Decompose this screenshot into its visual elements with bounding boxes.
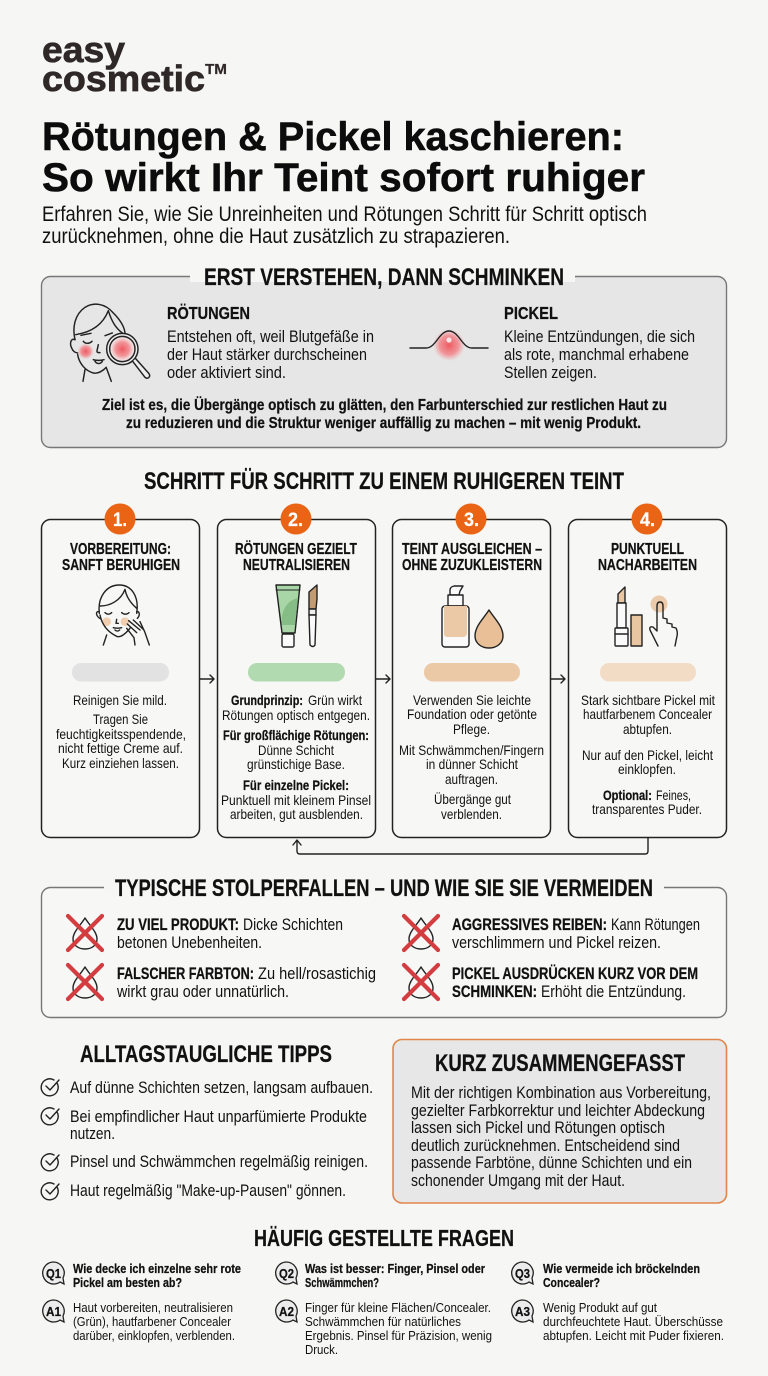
panel: everyday tips: nutzen.	[70, 1125, 115, 1143]
colour swatch	[600, 663, 696, 682]
step 1 card: Tragen Sie	[93, 711, 148, 727]
step 3 card: OHNE ZUZUKLEISTERN	[402, 557, 542, 574]
heading: steps: SCHRITT FÜR SCHRITT ZU EINEM RUHIGEREN TEINT	[144, 468, 624, 495]
step 1 card: VORBEREITUNG:	[70, 541, 171, 558]
step 2 card	[218, 504, 376, 838]
icon: A1 bubble	[43, 1300, 64, 1322]
step 2 card: Für einzelne Pickel:	[243, 777, 349, 793]
icon: A1 bubble: A1	[46, 1304, 61, 1319]
step 1 card: 1.	[113, 510, 127, 531]
panel: pitfalls: Erhöht die Entzündung.	[541, 983, 686, 1001]
panel: pitfalls: FALSCHER FARBTON:	[117, 965, 254, 983]
panel: pitfalls: Kann Rötungen	[611, 916, 700, 934]
panel: pitfalls: Dicke Schichten	[243, 916, 343, 934]
step 1 card: Kurz einziehen lassen.	[62, 755, 179, 771]
subtitle: Erfahren Sie, wie Sie Unreinheiten und Rötungen Schritt für Schritt optisch	[42, 203, 647, 226]
FAQ column 3: abtupfen. Leicht mit Puder fixieren.	[543, 1328, 724, 1343]
step 3 card: Pflege.	[453, 721, 490, 737]
step 4 card: Stark sichtbare Pickel mit	[581, 692, 715, 708]
step 3 card: Übergänge gut	[434, 790, 511, 807]
panel: everyday tips	[41, 1041, 373, 1200]
step 3 card: verblenden.	[441, 806, 502, 822]
step 2 card: Dünne Schicht	[258, 742, 334, 758]
block: redness: Entstehen oft, weil Blutgefäße in	[167, 328, 374, 346]
title: Rötungen & Pickel kaschieren:	[42, 115, 624, 159]
colour swatch	[248, 663, 345, 682]
panel: pitfalls: verschlimmern und Pickel reizen.	[452, 934, 661, 952]
icon: crossed drop 4	[404, 965, 438, 999]
title	[42, 115, 645, 200]
step 4 card: 4.	[640, 510, 655, 531]
step 2 card: Grundprinzip:	[231, 692, 303, 708]
step 2 card: 2.	[288, 510, 303, 531]
icon: crossed drop 1	[68, 916, 102, 950]
block: redness: RÖTUNGEN	[167, 303, 250, 323]
heading: first understand: ERST VERSTEHEN, DANN SCHMINKEN	[204, 264, 564, 291]
goal statement	[102, 395, 667, 432]
step 4 card: Nur auf den Pickel, leicht	[582, 747, 713, 763]
step 4 card: transparentes Puder.	[592, 801, 702, 817]
icon: Q3 bubble	[512, 1262, 533, 1284]
icon: crossed drop 3	[404, 916, 438, 950]
goal statement: Ziel ist es, die Übergänge optisch zu glätten, den Farbunterschied zur restlichen Haut zu	[102, 395, 667, 414]
step 4 card: Feines,	[656, 787, 691, 803]
icon: A3 bubble	[512, 1300, 533, 1322]
icon: face with magnifier	[71, 304, 150, 381]
subtitle: zurücknehmen, ohne die Haut zusätzlich zu strapazieren.	[42, 225, 510, 248]
panel: pitfalls: SCHMINKEN:	[452, 983, 537, 1001]
icon: Q1 bubble	[43, 1262, 64, 1284]
panel: pitfalls: betonen Unebenheiten.	[117, 934, 262, 952]
panel: summary: gezielter Farbkorrektur und leichter Abdeckung	[411, 1102, 705, 1120]
panel: summary: KURZ ZUSAMMENGEFASST	[435, 1050, 685, 1077]
step 1 card: nicht fettige Creme auf.	[58, 740, 183, 756]
block: pimples: PICKEL	[504, 303, 558, 323]
step 2 card: Punktuell mit kleinem Pinsel	[221, 792, 371, 808]
icon: A3 bubble: A3	[515, 1304, 530, 1319]
step 3 card: in dünner Schicht	[426, 756, 518, 772]
step 3 card: Foundation oder getönte	[407, 706, 537, 722]
panel: pitfalls: PICKEL AUSDRÜCKEN KURZ VOR DEM	[452, 964, 698, 983]
panel: summary: schonender Umgang mit der Haut.	[411, 1172, 625, 1190]
panel: pitfalls: ZU VIEL PRODUKT:	[117, 916, 239, 934]
FAQ column 3	[512, 1261, 724, 1343]
FAQ column 1	[43, 1261, 241, 1343]
step 4 card: NACHARBEITEN	[598, 557, 697, 574]
panel: pitfalls: Zu hell/rosastichig	[258, 965, 376, 983]
step 2 card: Grün wirkt	[308, 692, 362, 708]
FAQ column 3: Wenig Produkt auf gut	[543, 1300, 657, 1315]
panel: everyday tips: Auf dünne Schichten setzen, langsam aufbauen.	[70, 1079, 373, 1097]
FAQ column 1: (Grün), hautfarbener Concealer	[73, 1314, 232, 1329]
step 3 card: 3.	[464, 510, 479, 531]
step 1 card: SANFT BERUHIGEN	[62, 557, 180, 574]
step 4 card: Optional:	[603, 787, 652, 803]
step 4 card	[568, 504, 726, 838]
icon: crossed drop 2	[68, 965, 102, 999]
step 4 card: PUNKTUELL	[611, 541, 684, 558]
step 2 card: Rötungen optisch entgegen.	[222, 707, 370, 723]
colour swatch	[72, 663, 169, 682]
panel: first understand	[42, 264, 726, 448]
FAQ column 3: Wie vermeide ich bröckelnden	[543, 1261, 700, 1276]
panel: summary: deutlich zurücknehmen. Entscheidend sind	[411, 1137, 680, 1155]
goal statement: zu reduzieren und die Struktur weniger auffällig zu machen – mit wenig Produkt.	[126, 415, 641, 432]
step 4 card: abtupfen.	[623, 721, 672, 737]
icon: Q3 bubble: Q3	[515, 1266, 530, 1281]
subtitle	[42, 203, 647, 248]
icon: Q2 bubble: Q2	[279, 1266, 294, 1281]
block: pimples	[504, 303, 695, 382]
title: So wirkt Ihr Teint sofort ruhiger	[42, 156, 645, 200]
block: pimples: als rote, manchmal erhabene	[504, 346, 689, 364]
panel: summary: Mit der richtigen Kombination aus Vorbereitung,	[411, 1084, 711, 1102]
panel: everyday tips: Bei empfindlicher Haut unparfümierte Produkte	[70, 1108, 367, 1126]
FAQ column 1: Pickel am besten ab?	[73, 1275, 182, 1290]
block: redness: oder aktiviert sind.	[167, 364, 286, 382]
panel: summary: lassen sich Pickel und Rötungen optisch	[411, 1119, 665, 1137]
icon: concealer and fingertip	[615, 587, 677, 646]
FAQ column 1: darüber, einklopfen, verblenden.	[73, 1328, 235, 1343]
FAQ column 2: Finger für kleine Flächen/Concealer.	[305, 1300, 491, 1315]
FAQ column 2: Schwämmchen?	[305, 1275, 379, 1290]
arrows between steps	[200, 675, 648, 854]
FAQ column 3: Concealer?	[543, 1275, 600, 1290]
step 3 card: Verwenden Sie leichte	[413, 692, 531, 708]
block: redness: der Haut stärker durchscheinen	[167, 346, 367, 364]
step 3 card: auftragen.	[445, 771, 498, 787]
colour swatch	[424, 663, 520, 682]
block: pimples: Kleine Entzündungen, die sich	[504, 328, 695, 346]
icon: foundation and sponge	[442, 586, 503, 648]
block: redness	[167, 303, 374, 382]
step 2 card: Für großflächige Rötungen:	[223, 727, 369, 743]
FAQ column 2: Was ist besser: Finger, Pinsel oder	[305, 1261, 485, 1276]
logo	[42, 29, 227, 99]
panel: everyday tips: ALLTAGSTAUGLICHE TIPPS	[80, 1041, 332, 1068]
panel: pitfalls: AGGRESSIVES REIBEN:	[452, 916, 607, 934]
FAQ column 2: Schwämmchen für natürliches	[305, 1314, 461, 1329]
step 3 card: Mit Schwämmchen/Fingern	[399, 742, 544, 758]
icon: Q2 bubble	[276, 1262, 297, 1284]
panel: everyday tips: Haut regelmäßig "Make-up-Pausen" gönnen.	[70, 1182, 346, 1200]
FAQ column 2	[276, 1261, 492, 1357]
icon: checkmarks	[41, 1079, 59, 1200]
FAQ column 1: Wie decke ich einzelne sehr rote	[73, 1261, 241, 1276]
step 1 card	[42, 504, 200, 838]
icon: A2 bubble: A2	[279, 1304, 294, 1319]
icon: A2 bubble	[276, 1300, 297, 1322]
icon: face with hand	[97, 585, 149, 645]
logo: easy	[42, 29, 125, 70]
FAQ column 2: Druck.	[305, 1342, 338, 1357]
step 4 card: hautfarbenem Concealer	[583, 706, 712, 722]
step 1 card: feuchtigkeitsspendende,	[56, 726, 186, 742]
step 2 card: NEUTRALISIEREN	[243, 557, 350, 574]
step 2 card: grünstichige Base.	[247, 756, 345, 772]
heading: FAQ: HÄUFIG GESTELLTE FRAGEN	[254, 1225, 514, 1251]
FAQ column 2: Ergebnis. Pinsel für Präzision, wenig	[305, 1328, 492, 1343]
step 4 card: einklopfen.	[618, 761, 676, 777]
FAQ column 1: Haut vorbereiten, neutralisieren	[73, 1300, 233, 1315]
panel: everyday tips: Pinsel und Schwämmchen regelmäßig reinigen.	[70, 1153, 368, 1171]
panel: pitfalls: wirkt grau oder unnatürlich.	[116, 983, 289, 1001]
FAQ column 3: durchfeuchtete Haut. Überschüsse	[543, 1314, 723, 1329]
step 3 card: TEINT AUSGLEICHEN –	[402, 541, 542, 558]
icon: pimple	[410, 329, 488, 361]
icon: green tube and brush	[276, 585, 317, 647]
logo: cosmetic	[42, 58, 205, 99]
block: pimples: Stellen zeigen.	[504, 364, 597, 382]
step 2 card: arbeiten, gut ausblenden.	[230, 806, 363, 822]
panel: pitfalls	[42, 875, 726, 1018]
step 3 card	[392, 504, 550, 838]
icon: Q1 bubble: Q1	[46, 1266, 61, 1281]
step 2 card: RÖTUNGEN GEZIELT	[235, 541, 357, 558]
panel: summary: passende Farbtöne, dünne Schichten und ein	[411, 1154, 692, 1172]
panel: summary	[393, 1040, 726, 1203]
step 1 card: Reinigen Sie mild.	[73, 692, 167, 708]
logo: TM	[205, 61, 227, 78]
